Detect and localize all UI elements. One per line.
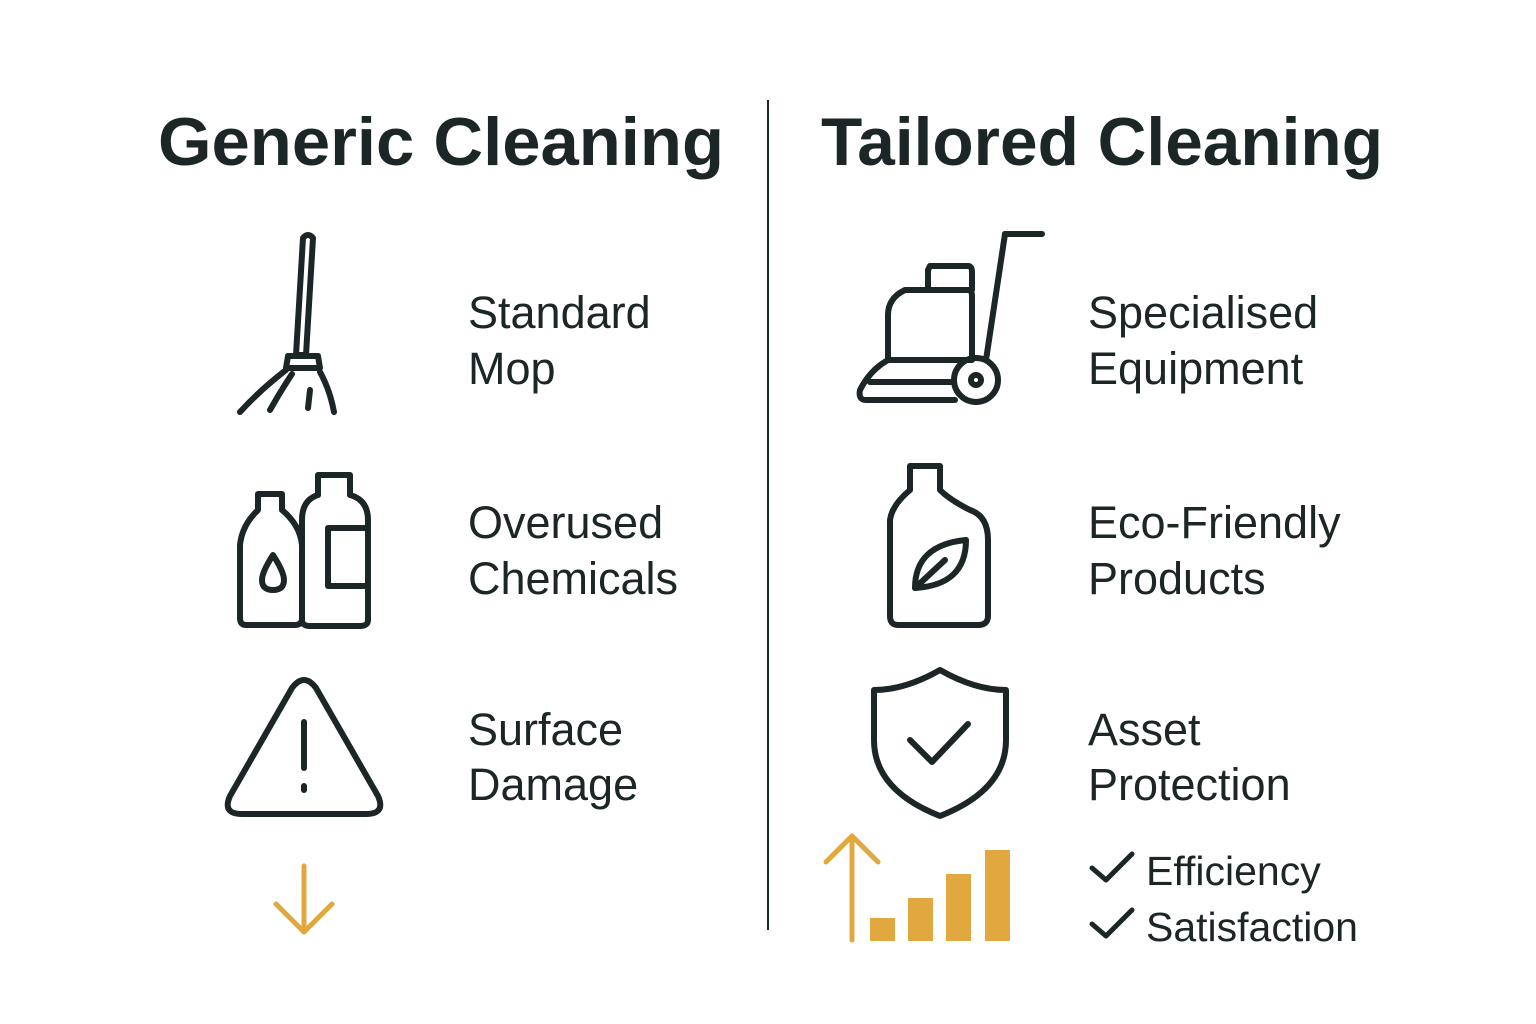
text: Eco-Friendly Products: Eco-Friendly: [1088, 497, 1341, 548]
text: Mop: [468, 343, 556, 394]
icon: down arrow: [276, 866, 332, 932]
text: Damage: [468, 759, 638, 810]
text: Overused Chemicals: Overused: [468, 497, 663, 548]
icon: warning triangle: [228, 680, 380, 814]
icon: shield check: [874, 670, 1006, 816]
title: Generic Cleaning: Generic Cleaning: [158, 104, 724, 180]
text: Efficiency, Satisfaction checklist: [1092, 848, 1358, 950]
icon: floor machine: [860, 234, 1042, 402]
icon: chemical bottles: [240, 475, 368, 626]
text: Surface Damage: Surface: [468, 704, 623, 755]
text: Efficiency, Satisfaction checklist: Satisfaction: [1146, 904, 1358, 950]
text: Equipment: [1088, 343, 1304, 394]
icon: eco bottle: [890, 466, 988, 625]
text: Specialised Equipment: Specialised: [1088, 287, 1318, 338]
text: Asset Protection: Asset: [1088, 704, 1201, 755]
text: Standard Mop: Standard: [468, 287, 651, 338]
text: Chemicals: [468, 553, 678, 604]
title: Tailored Cleaning: Tailored Cleaning: [821, 104, 1383, 180]
text: Products: [1088, 553, 1266, 604]
text: Efficiency, Satisfaction checklist: Efficiency: [1146, 848, 1321, 894]
icon: mop: [240, 235, 334, 412]
chart: rising bars with up arrow: [826, 836, 1010, 941]
text: Protection: [1088, 759, 1291, 810]
